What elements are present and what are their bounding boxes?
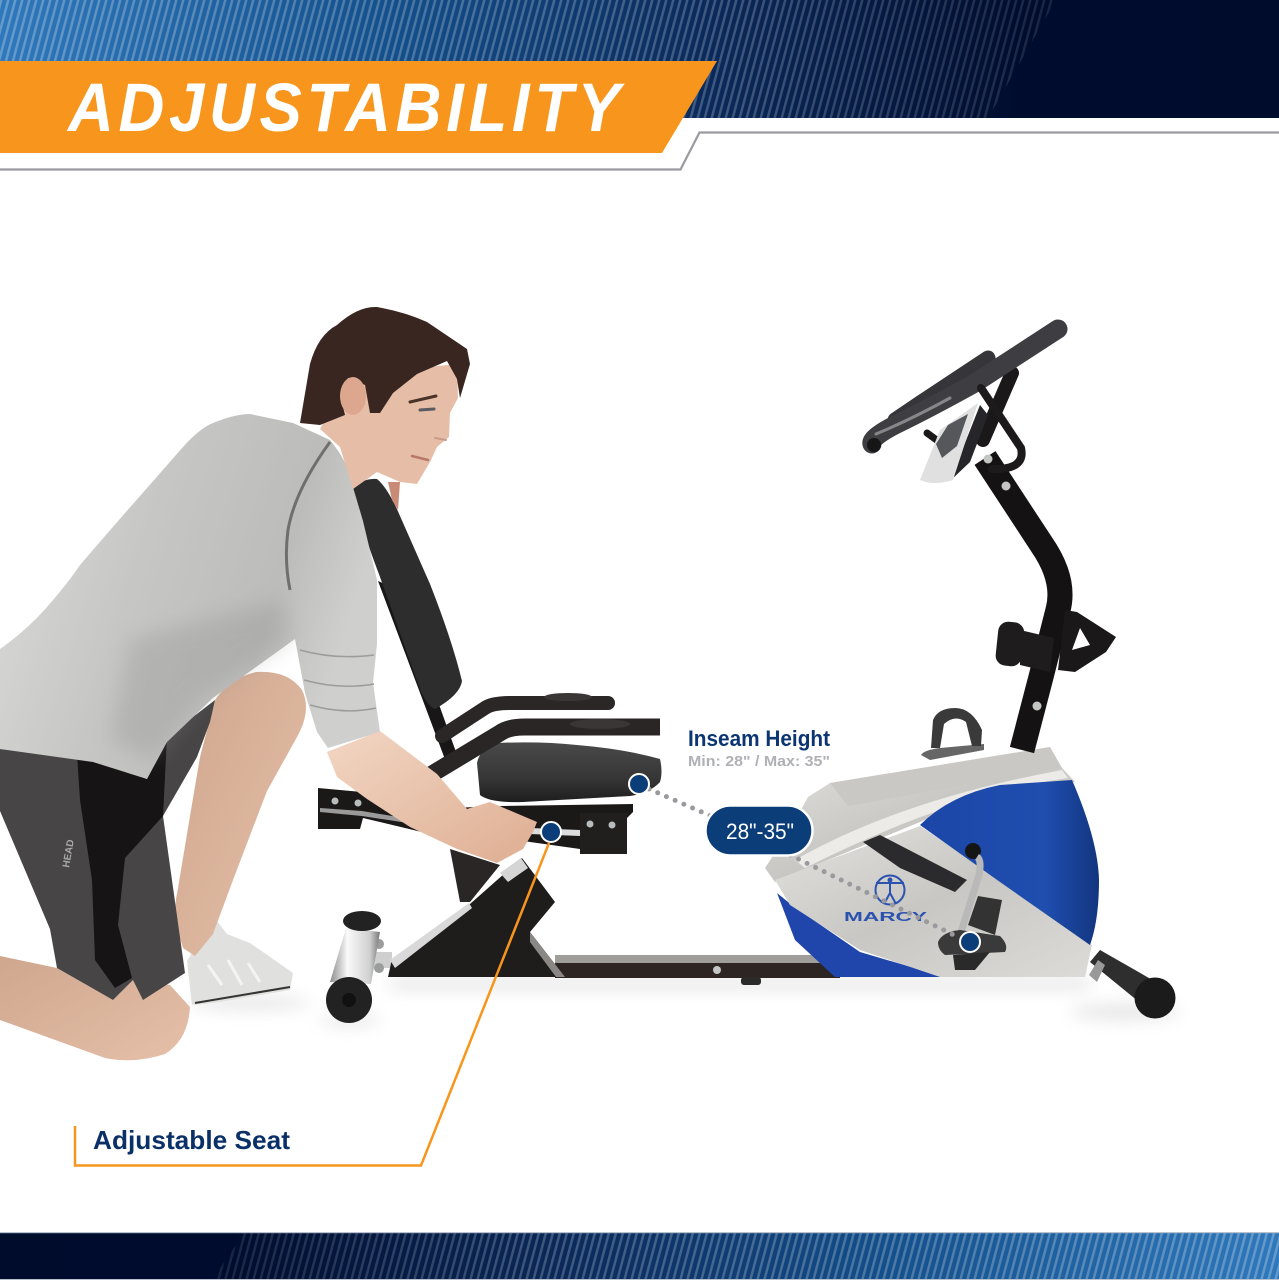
- bottom band: [0, 1232, 1279, 1280]
- range pill: [706, 806, 812, 856]
- title text: ADJUSTABILITY: [66, 70, 626, 147]
- near armrest: [427, 727, 660, 777]
- upright post: [985, 458, 1060, 750]
- seat rail: [318, 788, 633, 854]
- seat cushion: [477, 742, 662, 802]
- heading: Inseam Height: [688, 726, 831, 751]
- header white underlay and grey rule: [0, 118, 1279, 170]
- handlebars: [867, 329, 1058, 469]
- floor shadow: [190, 978, 1180, 1026]
- console rear housing: [950, 405, 988, 481]
- main floor beam: [555, 955, 840, 985]
- callout: inseam height: [629, 726, 980, 952]
- backrest pad: [352, 479, 462, 709]
- rear pedal with strap: [921, 708, 984, 760]
- sleeve folds: [300, 650, 376, 711]
- marker dot: [541, 822, 561, 842]
- Marcy logo: [844, 876, 928, 924]
- forearm and hand: [327, 731, 537, 863]
- leader line: [75, 843, 549, 1166]
- title banner: [0, 61, 717, 153]
- top header band: [0, 0, 1279, 118]
- seat base housing: [388, 849, 565, 977]
- dotted leader: [649, 789, 960, 938]
- blue rear panel: [920, 780, 1099, 945]
- front leg: [175, 672, 306, 956]
- ear: [340, 377, 366, 415]
- vent slots: [863, 835, 967, 892]
- shirt shading: [110, 600, 290, 760]
- callout: adjustable seat: [75, 822, 561, 1166]
- neck and face: [320, 364, 458, 489]
- recumbent bike: [318, 329, 1176, 1023]
- man: [0, 307, 537, 1060]
- pedal marker: [960, 932, 980, 952]
- console strut: [983, 373, 1012, 440]
- seat marker: [629, 774, 649, 794]
- front stabilizer foot: [1089, 950, 1176, 1018]
- range note: Min: 28" / Max: 35": [688, 753, 830, 770]
- range pill: 28"-35": [726, 819, 794, 844]
- Marcy logo: MARCY: [844, 909, 928, 924]
- label: Adjustable Seat: [93, 1125, 290, 1155]
- armrest grips: [544, 693, 630, 729]
- bottle holder: [1058, 610, 1116, 672]
- far armrest: [442, 703, 608, 736]
- console display: [920, 403, 978, 483]
- hand behind backrest: [388, 482, 400, 510]
- post bolts: [984, 454, 1042, 710]
- back leg: [0, 956, 190, 1060]
- far bar: [895, 358, 988, 420]
- seat loop handle: [981, 388, 1022, 469]
- display screen: [936, 414, 968, 458]
- adjustment knob: [995, 621, 1054, 672]
- shirt seam: [286, 442, 330, 590]
- seat back strut: [378, 581, 456, 762]
- facial features: [410, 396, 446, 460]
- console housing: [765, 747, 1099, 977]
- shoe: [187, 916, 293, 1005]
- crank and pedal: [938, 843, 1006, 970]
- shirt: [0, 414, 380, 779]
- hair: [300, 307, 470, 425]
- shorts logo: HEAD: [61, 839, 77, 869]
- shorts: [0, 700, 215, 1000]
- near bar and wrap: [872, 329, 1058, 444]
- rear stabilizer foot: [326, 911, 392, 1023]
